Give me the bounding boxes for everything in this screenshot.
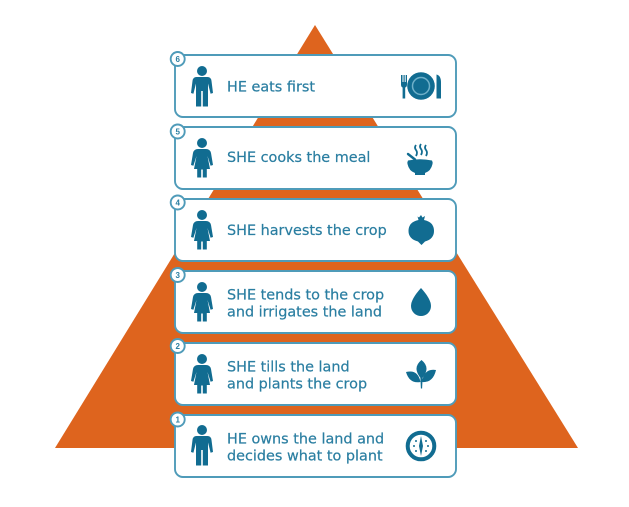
card 1: HE owns the land <box>171 412 456 477</box>
badge 2: 2 <box>175 342 180 351</box>
badge 5: 5 <box>175 128 180 136</box>
label: HE owns the land and <box>227 432 384 448</box>
label <box>227 360 367 392</box>
badge 1 <box>171 412 185 426</box>
icon: beet <box>408 215 434 245</box>
icon: woman <box>191 138 213 178</box>
icon: woman <box>191 354 213 394</box>
icon: woman <box>191 282 213 322</box>
card 4: SHE harvests the crop <box>171 196 456 261</box>
badge 5 <box>171 124 185 138</box>
label: and irrigates the land <box>227 304 382 320</box>
label: SHE cooks the meal <box>227 150 370 166</box>
card 5: SHE cooks the meal <box>171 124 456 189</box>
label: and plants the crop <box>227 376 367 392</box>
icon: plant <box>406 360 436 388</box>
badge 3: 3 <box>175 271 180 280</box>
label: decides what to plant <box>227 448 383 464</box>
icon: compass <box>408 433 434 459</box>
badge 6: 6 <box>175 55 180 64</box>
label: HE eats first <box>227 80 315 96</box>
badge 6 <box>171 52 185 66</box>
card 2: SHE tills the land <box>171 339 456 405</box>
orange pyramid <box>55 25 578 448</box>
label <box>227 432 384 464</box>
icon: steaming bowl <box>407 144 433 175</box>
badge 2 <box>171 339 185 353</box>
badge 1: 1 <box>175 416 180 424</box>
label: SHE tills the land <box>227 360 350 376</box>
card 6: HE eats first <box>171 52 456 117</box>
icon: water drop <box>411 288 431 316</box>
badge 4: 4 <box>175 198 180 208</box>
card 3: SHE tends to the crop <box>171 268 456 333</box>
icon: man <box>191 66 213 106</box>
label: SHE tends to the crop <box>227 287 384 303</box>
badge 4 <box>171 196 185 210</box>
icon: plate and cutlery <box>401 72 441 100</box>
label: SHE harvests the crop <box>227 223 387 239</box>
label <box>227 287 384 320</box>
icon: man <box>191 425 213 466</box>
icon: woman <box>191 210 213 250</box>
badge 3 <box>171 268 185 282</box>
